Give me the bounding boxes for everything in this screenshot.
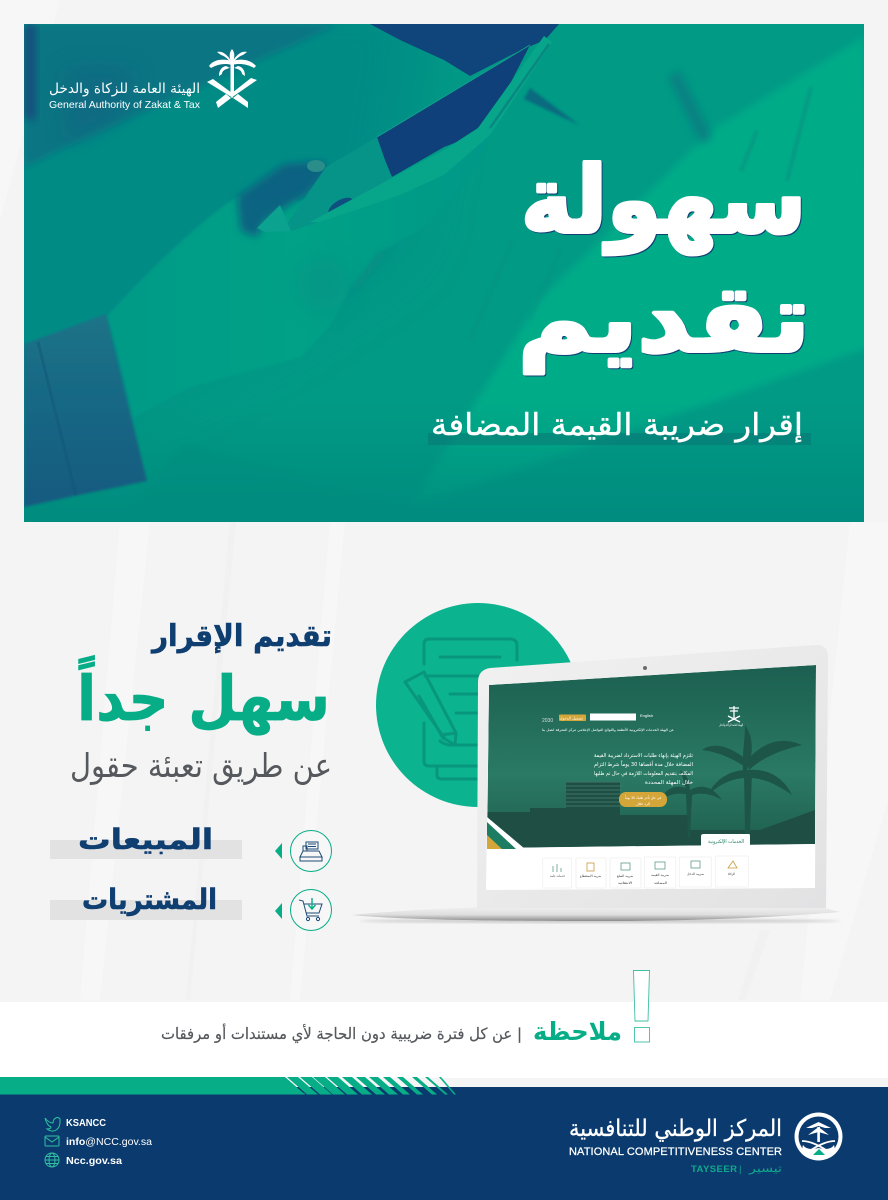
English name: General Authority of Zakat & Tax xyxy=(49,99,201,111)
website service cards: ضريبة السلع xyxy=(617,874,633,878)
website top bar: 2030 xyxy=(542,718,553,724)
program name xyxy=(691,1162,782,1175)
website button: في حال تأخر طلبك 30 يوماً xyxy=(625,795,661,800)
title line 1: سهولة xyxy=(522,148,807,256)
icon: mail xyxy=(45,1136,59,1146)
heading: filing the return: تقديم الإقرار xyxy=(150,619,332,654)
program name: TAYSEER xyxy=(691,1164,737,1175)
website navigation: عن الهيئة الخدمات الإلكترونية الأنظمة واللوائح التواصل الإعلامي مركز المعرفة اتصل بنا xyxy=(542,727,674,733)
note band xyxy=(0,970,888,1078)
logo: National Competitiveness Center xyxy=(569,1112,842,1175)
icon: emblem xyxy=(794,1112,842,1160)
website top bar xyxy=(542,713,653,724)
website hero paragraph: خلال المهلة المحددة xyxy=(645,780,693,786)
website service cards: ضريبة القيمة xyxy=(651,873,669,877)
hero photo: sleeve xyxy=(24,314,147,507)
laptop xyxy=(352,645,840,923)
item: sales xyxy=(50,823,332,872)
hero photo: tablet xyxy=(257,36,552,232)
hero title xyxy=(518,147,811,375)
website button: الرد خلال xyxy=(636,802,650,806)
website service cards: ضريبة الدخل xyxy=(687,872,704,876)
laptop base xyxy=(352,907,840,923)
website top bar: English xyxy=(640,713,653,718)
Arabic name: المركز الوطني للتنافسية xyxy=(569,1116,782,1142)
hero photo: paper sheet xyxy=(0,0,874,522)
footer stripe xyxy=(0,1077,456,1094)
contacts xyxy=(45,1117,152,1167)
text: website: Ncc.gov.sa xyxy=(66,1155,122,1167)
icon: palm and swords xyxy=(207,49,257,108)
website skyline xyxy=(487,782,815,848)
website hero paragraph: تلتزم الهيئة بإنهاء طلبات الاسترداد لضريبة القيمة xyxy=(594,753,693,759)
program name: تيسير xyxy=(748,1162,782,1175)
website button xyxy=(619,792,667,807)
website diagonal corner xyxy=(487,817,525,849)
hero subtitle: إقرار ضريبة القيمة المضافة xyxy=(431,408,803,443)
English name: NATIONAL COMPETITIVENESS CENTER xyxy=(569,1146,782,1158)
arrow xyxy=(275,903,282,919)
website service cards xyxy=(543,856,748,888)
text: email: info@NCC.gov.sa xyxy=(66,1136,152,1148)
website service cards: المضافة xyxy=(654,881,667,885)
item: purchases: المشتريات xyxy=(82,883,217,916)
icon: twitter xyxy=(45,1118,60,1131)
note text: | عن كل فترة ضريبية دون الحاجة لأي مستندات أو مرفقات xyxy=(161,1023,522,1044)
website service cards: الانتقائية xyxy=(618,881,632,885)
icon: exclamation mark xyxy=(634,970,650,1042)
icon: document and pen xyxy=(405,639,517,779)
website hero paragraph: المضافة خلال مدة أقصاها 30 يوماً شرط التزام xyxy=(594,760,693,768)
icon: shopping cart xyxy=(290,890,332,930)
program name: | xyxy=(739,1164,741,1175)
hero photo: hand xyxy=(108,158,414,410)
website service cards: خدمات عامة xyxy=(550,874,565,878)
title line 2: تقديم xyxy=(519,267,811,375)
Arabic name: الهيئة العامة للزكاة والدخل xyxy=(49,81,200,97)
item: sales: المبيعات xyxy=(78,823,213,856)
text: twitter handle: KSANCC xyxy=(66,1117,106,1129)
title line 2: تقديم xyxy=(518,266,810,374)
website service cards: ضريبة الاستقطاع xyxy=(580,874,601,878)
heading: very easy: سهل جداً xyxy=(77,654,330,735)
website top bar: تسجيل الدخول xyxy=(560,716,583,720)
icon: globe xyxy=(45,1153,59,1167)
logo: General Authority of Zakat and Tax xyxy=(49,49,257,111)
website service cards: الزكاة xyxy=(728,872,735,876)
title line 1: سهولة xyxy=(521,147,806,255)
website services tab: الخدمات الإلكترونية xyxy=(708,839,744,845)
laptop lid xyxy=(477,645,828,908)
item: purchases xyxy=(50,883,332,930)
icon: cash register xyxy=(290,830,332,872)
website hero paragraph xyxy=(594,753,693,786)
website services tab xyxy=(701,834,750,847)
footer xyxy=(0,1077,888,1200)
website palm tree xyxy=(664,726,802,830)
arrow xyxy=(275,843,282,859)
hero banner xyxy=(0,0,874,522)
green circle with document icon xyxy=(376,603,580,807)
laptop screen: website xyxy=(486,665,816,890)
website hero paragraph: المكلف بتقديم المعلومات اللازمة في حال تم طلبها xyxy=(594,770,693,777)
website logo xyxy=(719,706,743,727)
text: by filling fields: عن طريق تعبئة حقول xyxy=(70,746,332,786)
website logo: الهيئة العامة للزكاة والدخل xyxy=(719,723,743,727)
note label: ملاحظة xyxy=(533,1017,622,1046)
